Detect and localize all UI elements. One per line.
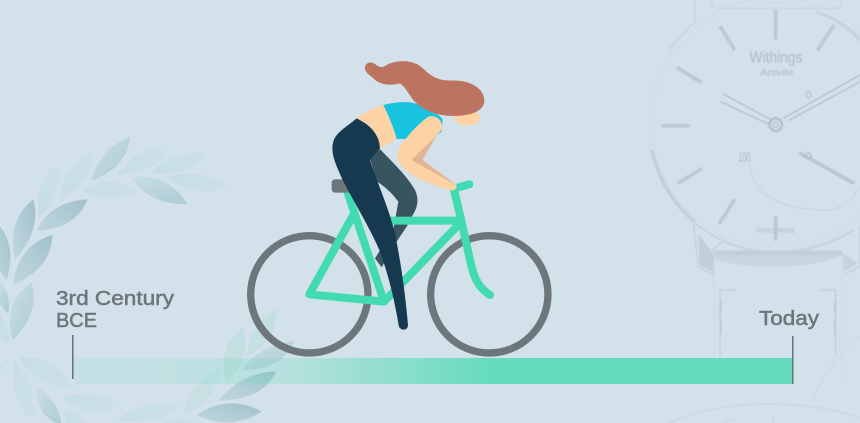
watch dial text: Activité [759,67,793,77]
lower branch leaves [14,308,295,423]
front arm [397,116,457,191]
watch dial text: SWISS MADE [756,229,795,235]
watch hour ticks [662,10,834,241]
front leg [332,118,408,330]
label: 3rd Century BCE: 3rd Century [56,288,174,310]
hair [365,61,484,116]
watch dial text: Withings [750,49,803,66]
icon: rear wheel [251,236,368,353]
saddle [332,179,355,193]
back leg [370,149,417,267]
cyclist and bicycle [251,61,548,353]
back arm [411,135,457,185]
start tick [72,335,74,379]
end tick [792,336,794,384]
timeline bar [74,358,792,384]
icon: front wheel [431,236,548,353]
watch dial text: 0 [805,90,812,102]
face [455,110,480,126]
watch sketch [648,0,860,423]
watch dial text: 100 [738,150,751,164]
waist [357,105,397,148]
laurel wreath [0,137,295,423]
label: 3rd Century BCE [56,288,174,332]
watch strap [714,251,842,383]
upper branch leaves [0,137,229,378]
watch hands [721,75,860,210]
second watch at bottom [668,337,860,423]
label: 3rd Century BCE: BCE [56,310,97,332]
bicycle frame [309,184,490,302]
watch case [648,0,860,275]
top [383,102,443,139]
watch dial text [738,49,812,235]
label: Today: Today [759,308,819,330]
